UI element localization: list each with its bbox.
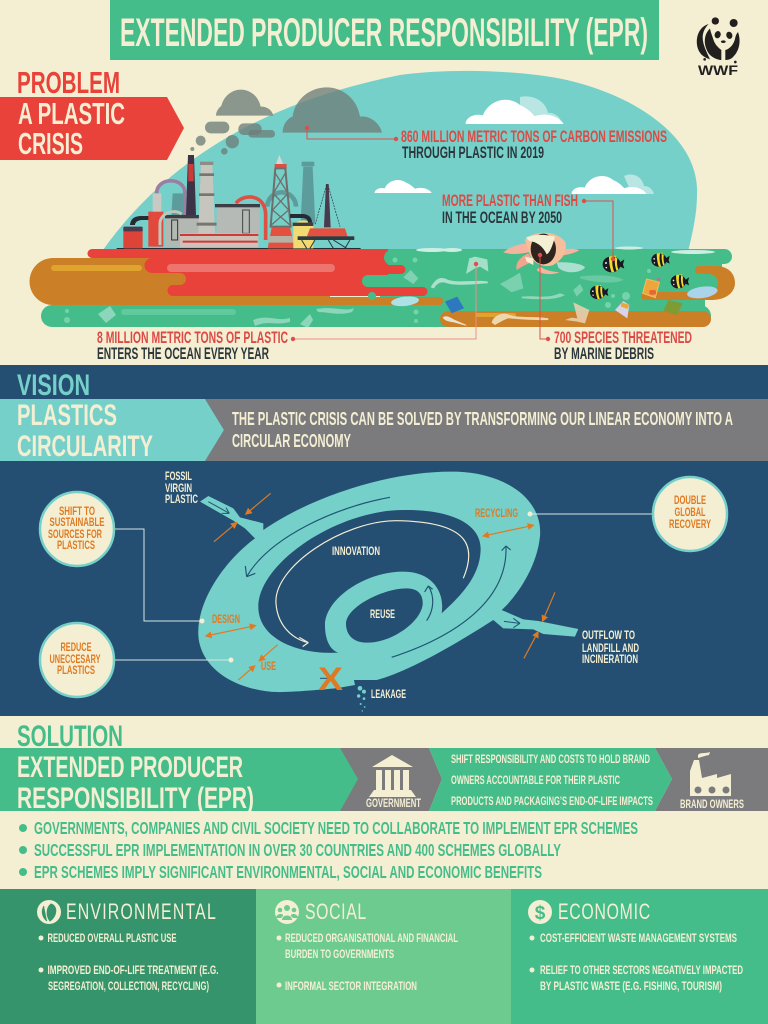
panel: environmental	[0, 889, 256, 1024]
panel: environmental: IMPROVED END-OF-LIFE TREATMENT (E.G.	[48, 963, 218, 977]
callout: shift to sustainable sources	[40, 492, 204, 624]
reuse hole	[346, 588, 423, 643]
illustration: ocean of plastic waste	[30, 233, 735, 328]
loop labels: VIRGIN	[165, 481, 192, 495]
icon: smoke clouds	[190, 87, 382, 155]
panel: problem banner: CRISIS	[18, 126, 83, 161]
heading: vision: VISION	[17, 369, 90, 402]
leakage drops	[357, 686, 366, 712]
callout: shift to sustainable sources: SHIFT TO	[59, 504, 95, 518]
panel: shift responsibility: OWNERS ACCOUNTABLE FOR THEIR PLASTIC	[451, 773, 620, 787]
highlights	[51, 265, 142, 271]
heading: problem: PROBLEM	[17, 65, 120, 100]
panel: vision statement	[205, 399, 768, 461]
panel: social	[256, 889, 511, 1024]
green tongues	[362, 250, 414, 300]
callout: shift to sustainable sources: PLASTICS	[57, 538, 95, 552]
panel: EPR banner	[0, 748, 442, 815]
panel: government: GOVERNMENT	[366, 796, 421, 810]
loop labels: LANDFILL AND	[582, 641, 639, 655]
panel: environmental: ENVIRONMENTAL	[66, 901, 216, 925]
turtle	[503, 233, 579, 274]
orange plastic flow	[30, 258, 735, 327]
callout: reduce unnecessary plastics: REDUCE	[60, 640, 92, 654]
loop labels: DESIGN	[212, 612, 240, 626]
panel: social: BURDEN TO GOVERNMENTS	[285, 947, 394, 961]
panel: economic	[511, 889, 768, 1024]
panel: shift responsibility	[429, 748, 672, 811]
panel: EPR banner: EXTENDED PRODUCER	[17, 751, 243, 784]
callout: carbon emissions: THROUGH PLASTIC IN 2019	[402, 143, 544, 162]
panel: problem banner	[0, 96, 184, 161]
flow arrows	[247, 497, 390, 577]
loop labels: PLASTIC	[165, 492, 198, 506]
callout: 700 species: BY MARINE DEBRIS	[554, 344, 654, 363]
callout: 8 million tons: 8 MILLION METRIC TONS OF PLASTIC	[97, 328, 288, 347]
bubbles	[64, 258, 651, 323]
inner channel	[258, 510, 481, 653]
icon: leaf	[37, 900, 61, 924]
icon: people	[275, 900, 299, 924]
heading: solution: SOLUTION	[17, 720, 123, 753]
panel: economic: ECONOMIC	[558, 901, 650, 925]
callout: reduce unnecessary plastics: PLASTICS	[57, 663, 95, 677]
callout: shift to sustainable sources: SOURCES FOR	[48, 527, 102, 541]
panel: brand owners	[655, 748, 768, 811]
icon: government building	[369, 755, 416, 797]
panel: social: INFORMAL SECTOR INTEGRATION	[285, 979, 417, 993]
loop labels: INNOVATION	[332, 544, 380, 558]
loop labels: LEAKAGE	[371, 687, 406, 701]
sky dome	[103, 71, 697, 252]
callout: reduce unnecessary plastics: UNECCESARY	[50, 652, 100, 666]
diagram: circular economy loop	[165, 469, 639, 712]
drifting plastic: left side	[98, 306, 354, 328]
icon: WWF panda logo: WWF	[698, 62, 739, 78]
green sea	[41, 249, 732, 327]
waves	[416, 246, 715, 254]
loop labels: RECYCLING	[475, 506, 518, 520]
callout: double global recovery: RECOVERY	[669, 517, 711, 531]
callout: more plastic than fish: MORE PLASTIC THAN FISH	[442, 191, 578, 210]
callout: more plastic than fish	[442, 191, 615, 261]
icon: factory	[690, 752, 731, 796]
panel: vision background	[0, 365, 768, 716]
icon: WWF panda logo	[697, 17, 740, 78]
callout: 8 million tons: ENTERS THE OCEAN EVERY YEAR	[97, 344, 269, 363]
loop labels	[165, 469, 639, 701]
panel: shift responsibility: SHIFT RESPONSIBILITY AND COSTS TO HOLD BRAND	[451, 752, 650, 766]
callout: more plastic than fish: IN THE OCEAN BY 2050	[442, 208, 562, 227]
title banner	[110, 0, 659, 60]
panel: environmental: REDUCED OVERALL PLASTIC USE	[48, 931, 176, 945]
orange arrows	[206, 493, 555, 680]
callout: double global recovery: GLOBAL	[674, 505, 706, 519]
panel: government	[366, 755, 421, 810]
loop labels: USE	[261, 659, 276, 673]
icon: dollar	[528, 900, 552, 924]
loop labels: OUTFLOW TO	[582, 628, 635, 642]
panel: plastics circularity: CIRCULARITY	[17, 430, 153, 463]
icon: white clouds	[375, 96, 654, 194]
illustration: factory	[117, 155, 361, 249]
drifting plastic: ocean	[391, 257, 583, 326]
fish	[590, 253, 689, 299]
loop labels: INCINERATION	[582, 652, 638, 666]
red plastic flow	[88, 249, 428, 296]
panel: shift responsibility: PRODUCTS AND PACKAGING’S END-OF-LIFE IMPACTS	[451, 794, 653, 808]
icon: dollar: $	[535, 903, 546, 924]
callout: double global recovery: DOUBLE	[674, 493, 706, 507]
callout: reduce unnecessary plastics	[40, 623, 234, 697]
panel: plastics circularity	[0, 399, 224, 463]
panel: social: SOCIAL	[305, 901, 366, 925]
callout: double global recovery	[528, 477, 727, 551]
loop body	[198, 472, 578, 692]
callout: shift to sustainable sources: SUSTAINABLE	[50, 515, 104, 529]
panel: plastics circularity: PLASTICS	[17, 399, 117, 432]
callout: 700 species	[538, 253, 692, 363]
panel: environmental: SEGREGATION, COLLECTION, RECYCLING)	[48, 979, 209, 993]
panel: social: REDUCED ORGANISATIONAL AND FINANCIAL	[285, 931, 458, 945]
X mark: X	[318, 661, 344, 697]
list: EPR key points	[19, 818, 638, 882]
panel: problem banner: A PLASTIC	[18, 96, 125, 131]
loop labels: FOSSIL	[165, 469, 192, 483]
callout: carbon emissions	[305, 126, 667, 162]
callout: 8 million tons	[97, 262, 478, 363]
panel: vision statement: CIRCULAR ECONOMY	[232, 431, 351, 451]
panel: EPR banner: RESPONSIBILITY (EPR)	[17, 782, 254, 815]
loop labels: REUSE	[370, 607, 395, 621]
